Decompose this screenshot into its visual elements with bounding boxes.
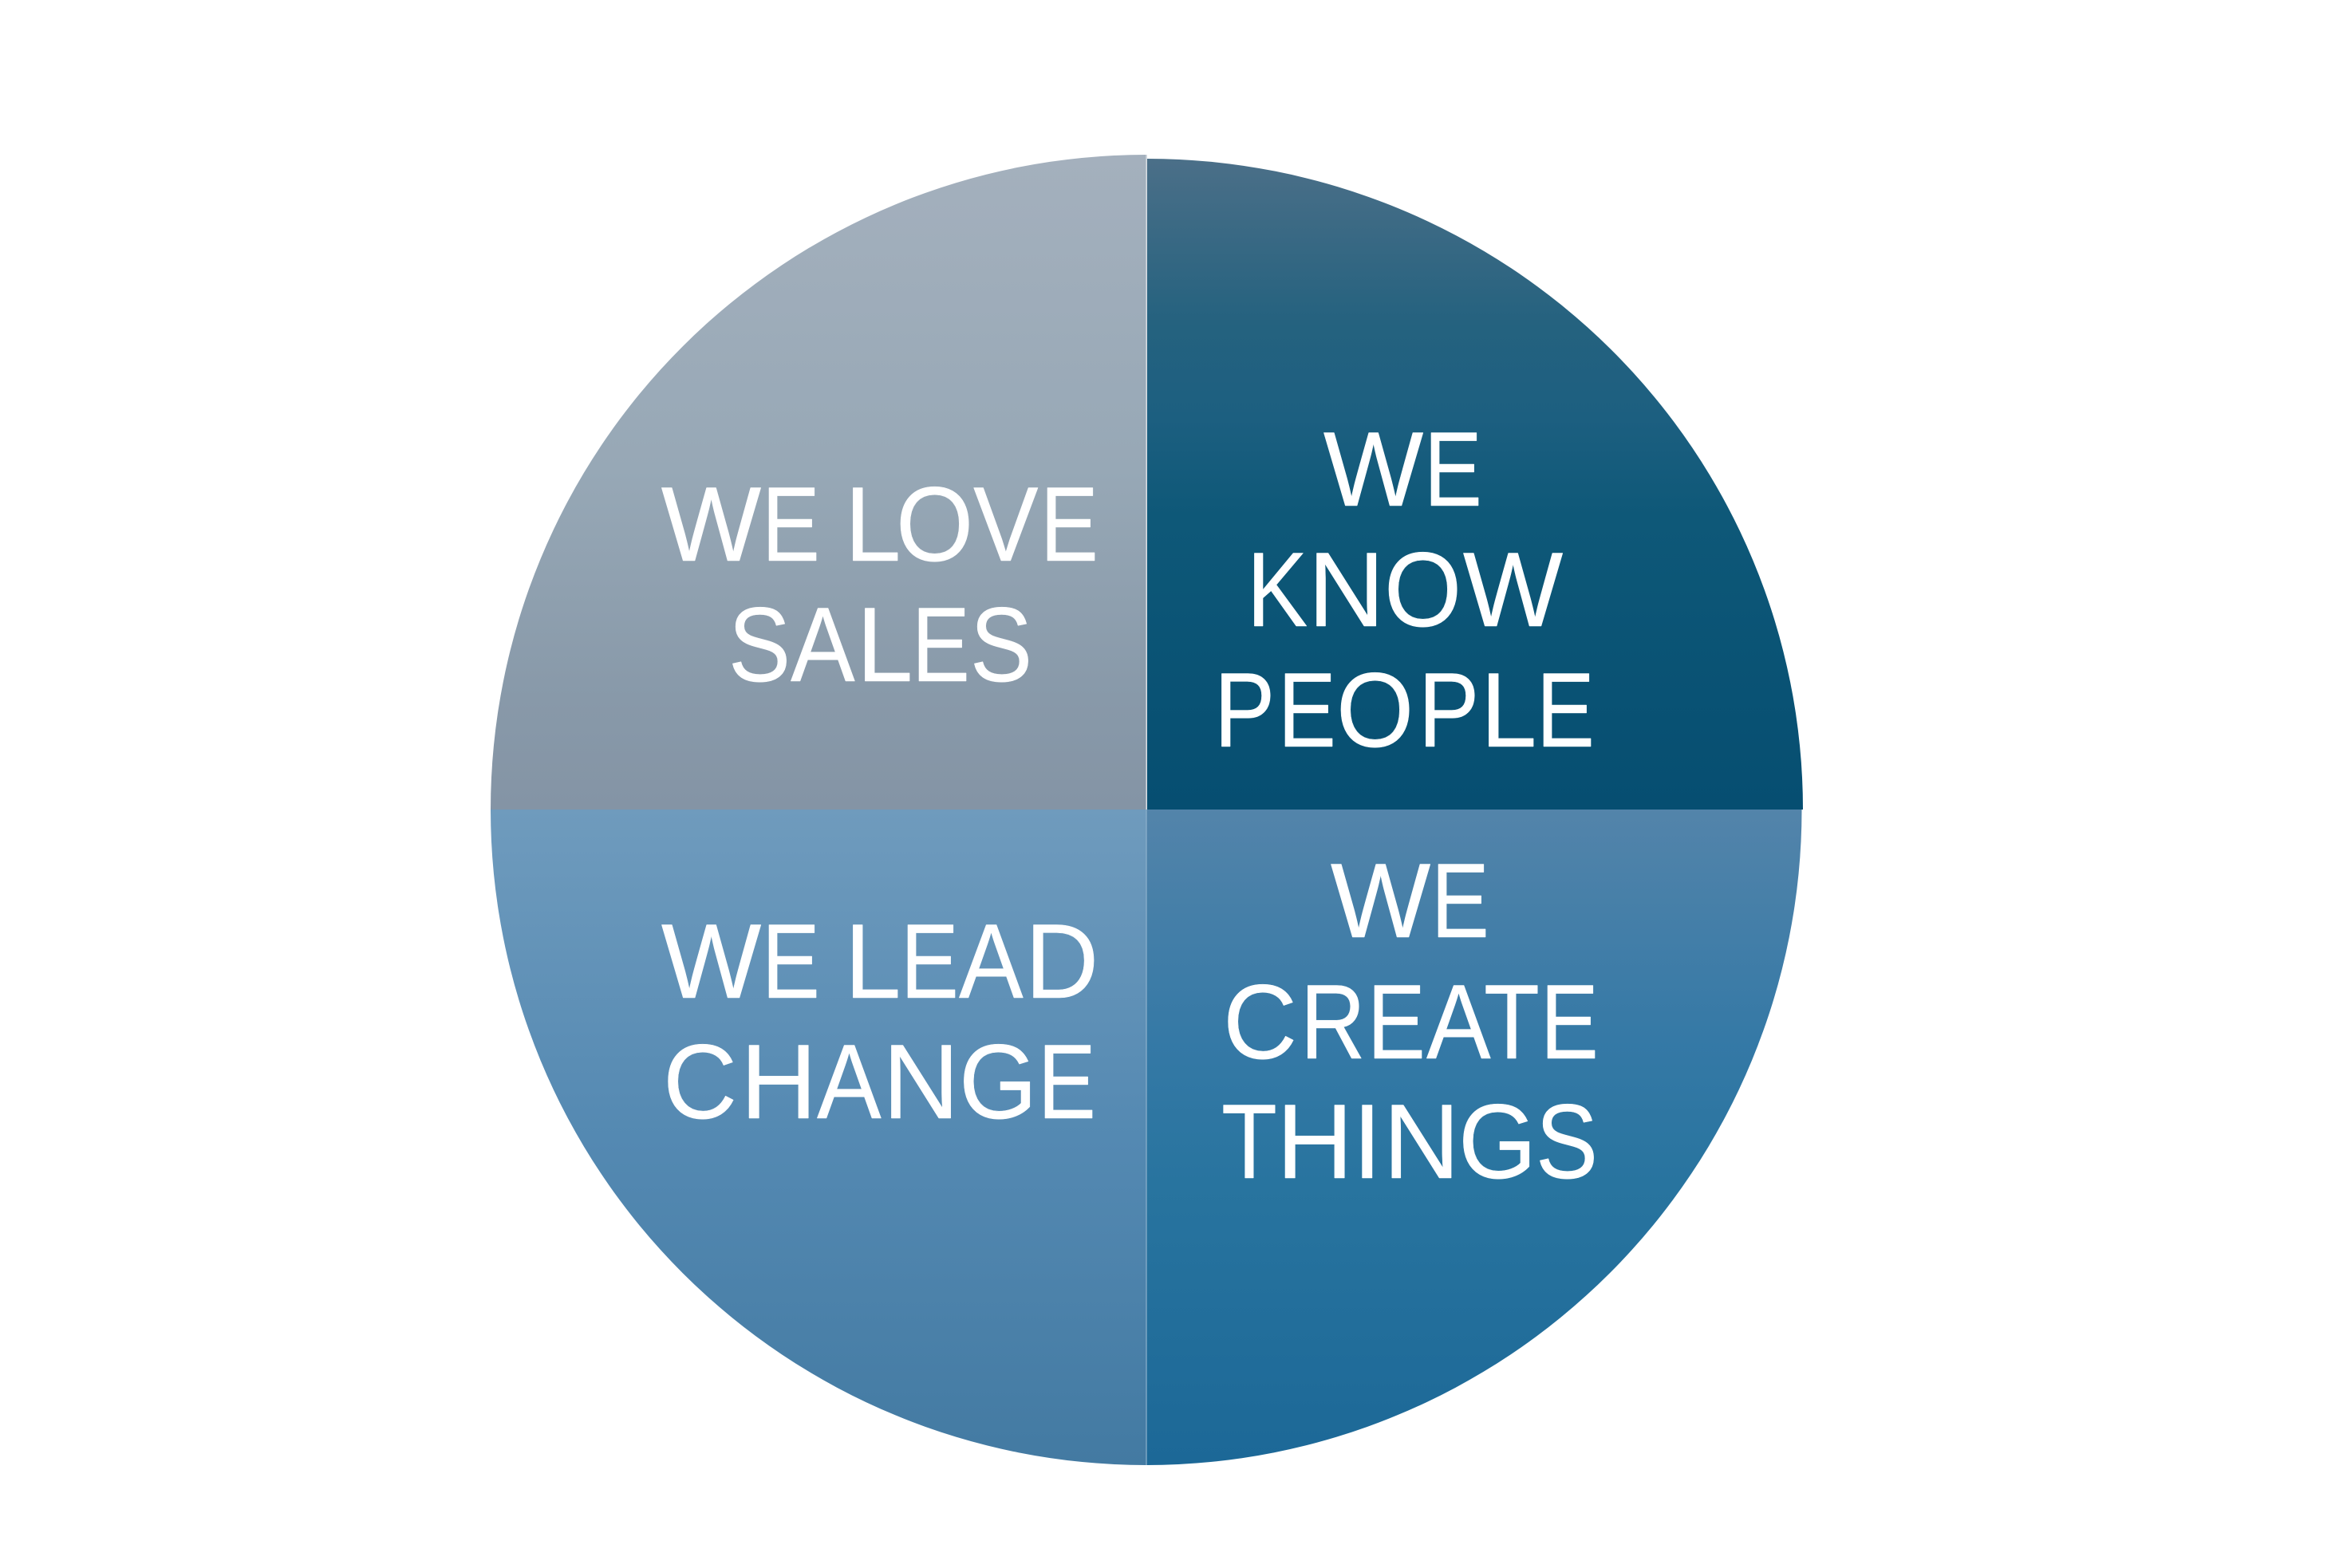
label: we know people: P	[1418, 652, 1479, 770]
label: we know people: N	[1308, 531, 1385, 649]
label: we create things	[1221, 842, 1599, 1201]
label: we create things: R	[1300, 963, 1366, 1081]
label: we know people: W	[1323, 411, 1423, 529]
label: we love sales: S	[970, 586, 1032, 704]
label: we know people: W	[1463, 531, 1563, 649]
label: we create things: E	[1431, 842, 1489, 960]
label: we love sales	[661, 466, 1098, 704]
label: we love sales: S	[728, 586, 791, 704]
label: we lead change	[661, 903, 1099, 1141]
label: we know people	[1214, 411, 1595, 770]
label: we love sales: V	[973, 466, 1039, 584]
label: we lead change: W	[661, 903, 761, 1021]
label: we create things: S	[1536, 1083, 1598, 1201]
wedge: lower left	[491, 810, 1146, 1465]
wedge: upper left	[491, 155, 1146, 810]
wedge: upper right	[1147, 159, 1803, 810]
label: we create things: A	[1426, 963, 1491, 1081]
label: we know people: E	[1536, 652, 1595, 770]
label: we lead change: C	[663, 1023, 737, 1141]
label: we know people: O	[1384, 531, 1462, 649]
label: we love sales: L	[857, 586, 913, 704]
label: we know people: E	[1278, 652, 1335, 770]
label: we love sales: E	[1040, 466, 1098, 584]
label: we lead change: G	[959, 1023, 1037, 1141]
label: we create things: G	[1458, 1083, 1536, 1201]
label: we love sales: W	[661, 466, 761, 584]
label: we lead change: A	[817, 1023, 882, 1141]
label: we create things: C	[1223, 963, 1297, 1081]
label: we lead change: E	[1038, 1023, 1096, 1141]
label: we love sales: O	[896, 466, 973, 584]
label: we know people: O	[1336, 652, 1414, 770]
label: we know people: L	[1481, 652, 1537, 770]
label: we create things: T	[1484, 963, 1540, 1081]
label: we love sales: A	[791, 586, 855, 704]
wedge: lower right	[1146, 810, 1801, 1465]
label: we create things: H	[1276, 1083, 1353, 1201]
label: we lead change: A	[959, 903, 1024, 1021]
label: we lead change: E	[901, 903, 958, 1021]
label: we know people: K	[1247, 531, 1308, 649]
label: we know people: P	[1214, 652, 1275, 770]
label: we create things: E	[1367, 963, 1425, 1081]
label: we love sales: E	[762, 466, 819, 584]
label: we create things: I	[1352, 1083, 1382, 1201]
label: we love sales: L	[845, 466, 901, 584]
label: we create things: T	[1221, 1083, 1277, 1201]
label: we lead change: E	[762, 903, 820, 1021]
label: we know people: E	[1424, 411, 1481, 529]
label: we create things: N	[1383, 1083, 1460, 1201]
label: we lead change: N	[882, 1023, 960, 1141]
label: we lead change: L	[845, 903, 901, 1021]
label: we create things: W	[1331, 842, 1430, 960]
label: we lead change: H	[740, 1023, 817, 1141]
label: we love sales: E	[912, 586, 969, 704]
label: we create things: E	[1540, 963, 1599, 1081]
label: we lead change: D	[1024, 903, 1099, 1021]
